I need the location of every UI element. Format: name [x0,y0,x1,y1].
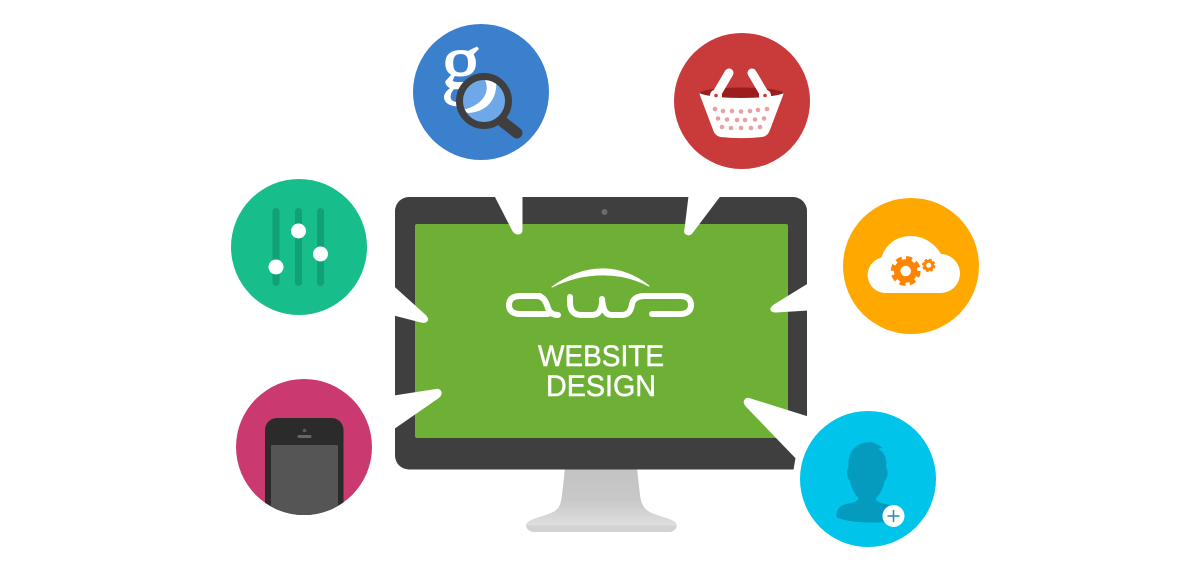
phone [265,418,344,515]
title: website design: DESIGN [546,370,656,403]
slider knobs [268,224,328,274]
pointer: search [495,196,522,234]
magnifying glass ring and handle [460,76,517,133]
title: website design [538,340,664,403]
blue circle [413,24,549,160]
slider tracks [272,208,324,286]
basket body [700,94,783,138]
icon: cloud settings [843,198,979,334]
callout pointers [394,196,808,470]
pointer: basket [685,196,720,235]
logo letters [509,296,558,315]
phone speaker [298,435,312,438]
google letter g: g [441,17,482,107]
person silhouette [836,442,899,523]
icon: google search [413,17,549,160]
pointer: profile [744,398,808,470]
orange circle [843,198,979,334]
logo arc [552,269,649,287]
add badge [882,505,904,527]
phone body [265,418,344,515]
monitor [395,197,807,470]
small gear [923,260,934,271]
webcam [602,209,608,215]
magnifying glass lens [459,76,509,126]
cloud [868,236,960,293]
monitor bezel [395,197,807,470]
handle pivots [710,90,722,102]
magnified g stroke [464,80,496,113]
large gear [893,258,919,284]
green circle [231,179,367,315]
pointer: sliders [394,287,428,322]
cyan circle [800,411,936,547]
phone screen [271,445,338,515]
pointer: phone [394,389,441,428]
pink circle [236,379,372,515]
phone camera [303,429,306,432]
monitor screen [415,224,788,438]
icon: shopping basket [674,33,810,169]
awp logo [509,269,691,315]
title: website design: WEBSITE [538,340,664,373]
plus sign [888,510,900,522]
red circle [674,33,810,169]
basket holes [713,107,769,130]
icon: add profile [800,411,936,547]
basket rim [700,88,783,98]
basket handles [716,73,765,95]
monitor stand [526,468,677,532]
icon: smartphone [236,379,372,515]
pointer: cloud [771,284,808,312]
icon: sliders [231,179,367,315]
